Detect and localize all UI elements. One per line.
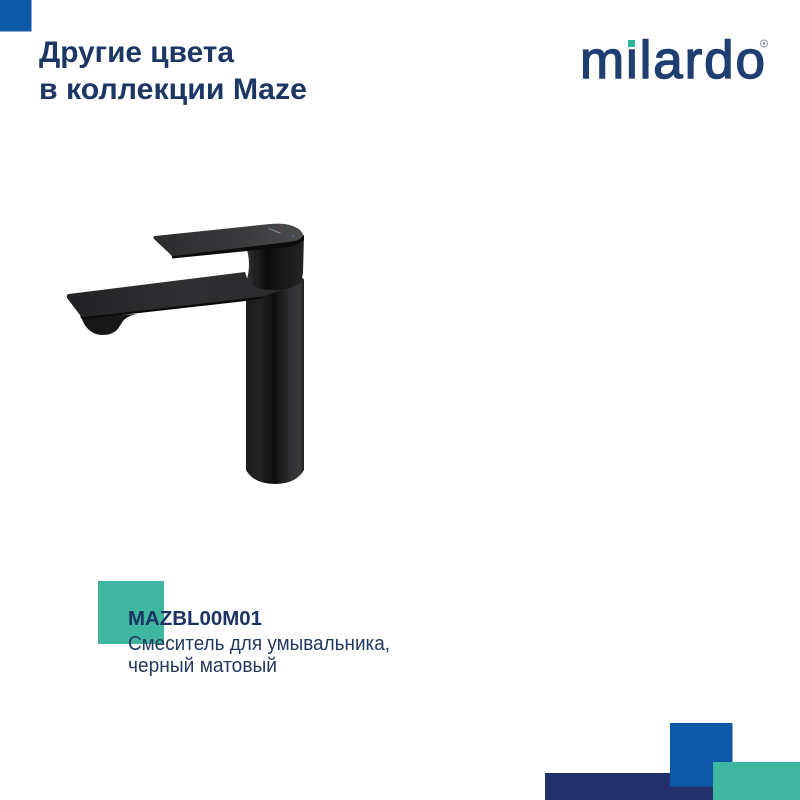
- title: в коллекции Maze: [39, 73, 307, 106]
- title: Другие цвета: [39, 36, 235, 69]
- faucet lever markings: [268, 225, 294, 237]
- title: [39, 36, 307, 106]
- logo: milardo: milardo: [580, 31, 765, 90]
- product code: MAZBL00M01: [128, 608, 262, 630]
- corner square: top left: [0, 0, 32, 32]
- faucet product photo: [67, 224, 304, 484]
- corner blocks: bottom right: [545, 723, 800, 800]
- faucet aerator: [81, 314, 137, 335]
- faucet spout plate: [67, 272, 285, 317]
- panel: product caption: [98, 581, 390, 677]
- product description: Смеситель для умывальника,: [128, 633, 390, 655]
- product description: [128, 633, 390, 677]
- faucet lever plate: [153, 224, 303, 256]
- teal accent square: [98, 581, 164, 644]
- product description: черный матовый: [128, 655, 277, 677]
- faucet body: [246, 278, 304, 484]
- faucet handle cylinder: [247, 235, 304, 290]
- faucet spout underside: [80, 296, 264, 320]
- faucet lever underside: [172, 235, 304, 258]
